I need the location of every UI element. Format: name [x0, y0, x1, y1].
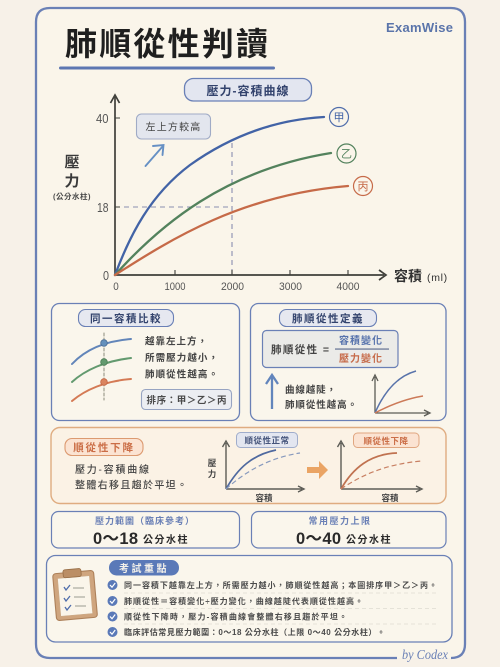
steepness text: 曲線越陡，	[285, 384, 336, 396]
x axis title	[394, 268, 448, 284]
chart: normal compliance: 壓	[208, 458, 217, 468]
axes	[110, 95, 386, 280]
key point 2: 肺順從性＝容積變化÷壓力變化，曲線越陡代表順從性越高。	[124, 596, 363, 606]
key point 3: 順從性下降時，壓力-容積曲線會整體右移且趨於平坦。	[124, 612, 347, 622]
panel: compliance definition	[250, 304, 446, 420]
mini curves with same-volume markers	[72, 333, 131, 401]
y axis tick labels: 18	[97, 200, 108, 215]
chart: normal compliance: 力	[208, 469, 216, 479]
y axis title: (公分水柱)	[53, 191, 91, 201]
explanation text: 整體右移且趨於平坦。	[75, 478, 187, 492]
arrow: toward upper left	[146, 145, 164, 166]
panel heading: 同一容積比較	[90, 312, 162, 325]
panel: exam key points	[46, 556, 452, 642]
ranking box: 排序：甲＞乙＞丙	[146, 394, 226, 406]
brand: ExamWise: ExamWise	[386, 20, 453, 35]
guide lines at 2000 ml and 18	[115, 143, 232, 275]
stat: upper pressure limit: 常用壓力上限	[308, 515, 372, 526]
formula box: 容積變化	[339, 334, 383, 347]
explanation text: 壓力-容積曲線	[75, 463, 149, 476]
callout: upper left is higher: 左上方較高	[146, 120, 202, 134]
stat: pressure range: 壓力範圍（臨床參考）	[95, 515, 195, 526]
x axis tick labels: 3000	[279, 281, 302, 293]
chart: reduced compliance: 容積	[381, 493, 399, 503]
panel heading: 肺順從性定義	[292, 312, 364, 325]
key point 4: 臨床評估常見壓力範圍：0～18 公分水柱（上限 0～40 公分水柱）。	[124, 627, 385, 637]
key point 1: 同一容積下越靠左上方，所需壓力越小，肺順從性越高；本圖排序甲＞乙＞丙。	[124, 580, 437, 590]
signature: by Codex: by Codex	[402, 647, 448, 662]
chart: normal compliance: 容積	[255, 493, 273, 503]
x axis title: 容積	[394, 268, 422, 284]
formula box: 肺順從性 =	[271, 343, 329, 356]
stat: upper pressure limit: 公分水柱	[346, 533, 392, 546]
chart badge: 順從性下降	[363, 436, 409, 446]
mini chart: steep vs flat	[372, 371, 430, 416]
panel heading: 考試重點	[119, 562, 169, 575]
arrow: steeper	[266, 375, 278, 409]
label: 乙	[337, 144, 356, 163]
chart: normal compliance	[208, 432, 304, 503]
panel heading	[65, 438, 143, 456]
formula box: 壓力變化	[339, 352, 383, 365]
y axis title: 力	[64, 173, 80, 190]
label: 丙: 丙	[358, 181, 368, 193]
y axis title: 壓	[64, 154, 80, 171]
x axis tick labels: 1000	[164, 281, 186, 293]
explanation text: 越靠左上方，	[145, 336, 207, 348]
stat: pressure range	[52, 512, 240, 548]
curve: 甲	[115, 117, 324, 275]
panel: pressure-volume chart	[53, 78, 448, 293]
title: 肺順從性判讀	[65, 26, 268, 62]
callout: upper left is higher	[136, 114, 210, 139]
panel heading	[78, 310, 174, 326]
x axis title: (ml)	[427, 272, 448, 284]
y axis tick labels: 0	[103, 268, 109, 283]
chart badge: 順從性正常	[244, 436, 290, 446]
steepness text: 肺順從性越高。	[285, 399, 357, 411]
x axis tick labels: 2000	[221, 281, 244, 293]
x axis tick labels: 4000	[336, 281, 360, 293]
curve: 乙	[115, 153, 331, 275]
panel heading: 順從性下降	[73, 441, 135, 454]
y axis tick labels	[96, 111, 109, 283]
ranking box	[142, 390, 232, 410]
formula box	[262, 330, 398, 368]
explanation text	[75, 463, 187, 492]
icon: clipboard	[53, 568, 98, 621]
stat: upper pressure limit: 0～40	[296, 530, 341, 548]
chart heading: 壓力-容積曲線	[206, 83, 290, 98]
stat: pressure range: 0～18	[93, 530, 138, 548]
chart: reduced compliance	[338, 433, 422, 503]
y axis title	[53, 154, 91, 201]
x axis tick labels: 0	[113, 281, 119, 293]
stat: upper pressure limit	[252, 512, 446, 548]
panel heading	[109, 560, 179, 576]
explanation text: 所需壓力越小，	[145, 352, 218, 364]
title underline	[59, 66, 275, 70]
chart heading	[184, 78, 312, 101]
panel: reduced compliance	[51, 428, 446, 504]
label: 甲	[330, 108, 348, 126]
curve: 丙	[115, 186, 348, 275]
y axis tick labels: 40	[96, 111, 108, 126]
panel: same volume comparison	[52, 304, 240, 420]
stat: pressure range: 公分水柱	[143, 533, 189, 546]
x axis tick labels	[113, 281, 360, 293]
label: 乙: 乙	[341, 148, 352, 160]
arrow: normal to reduced	[307, 461, 328, 479]
steepness text	[285, 384, 357, 411]
label: 丙	[354, 176, 372, 196]
explanation text	[145, 336, 218, 380]
panel heading	[280, 310, 376, 326]
label: 甲: 甲	[334, 112, 344, 124]
explanation text: 肺順從性越高。	[145, 368, 218, 380]
